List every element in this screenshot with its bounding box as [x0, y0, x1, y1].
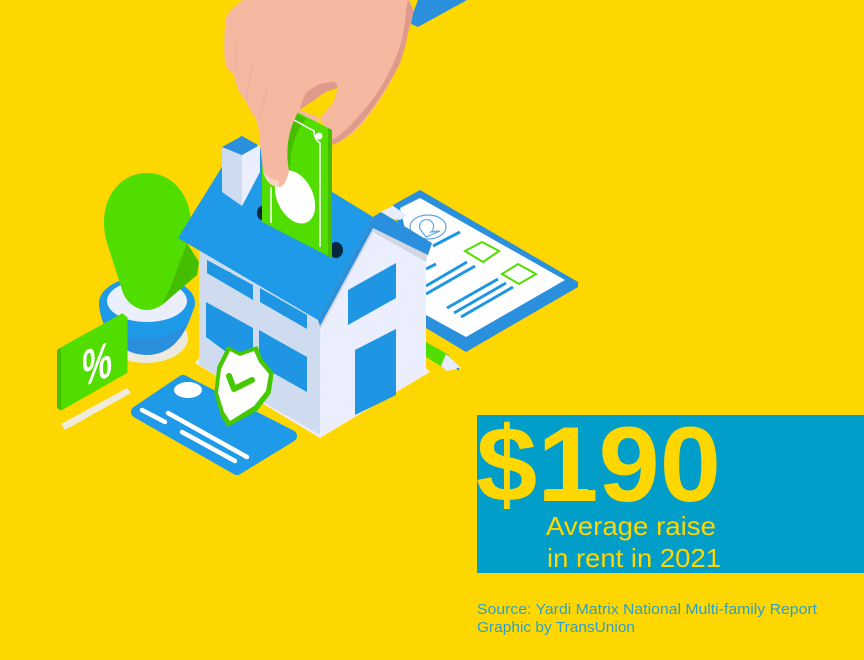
- icon: clipboard document: [380, 190, 578, 352]
- icon: chimney: [222, 136, 260, 206]
- source credits: Source: Yardi Matrix National Multi-family Report: [477, 601, 818, 618]
- panel: statistic: [476, 404, 864, 573]
- stat caption: [546, 511, 721, 573]
- icon: percent card: [57, 315, 131, 430]
- icon: credit card: [137, 381, 291, 469]
- icon: roof coin slot: [257, 206, 343, 258]
- stat caption: Average raise: [546, 511, 716, 541]
- icon: hand sleeve: [411, 0, 467, 27]
- icon: hand: [224, 0, 413, 187]
- icon: potted plant: [99, 173, 199, 363]
- icon: pencil: [426, 342, 461, 371]
- icon: percent card: %: [82, 330, 112, 398]
- source credits: Graphic by TransUnion: [477, 619, 635, 636]
- source credits: [477, 601, 818, 636]
- icon: dollar bill: [262, 112, 332, 258]
- stat caption: in rent in 2021: [547, 543, 721, 573]
- big number: $190: [476, 404, 721, 524]
- icon: index finger: [235, 43, 337, 187]
- icon: security shield: [215, 347, 273, 426]
- icon: house: [178, 136, 432, 438]
- house windows and door: [206, 260, 396, 415]
